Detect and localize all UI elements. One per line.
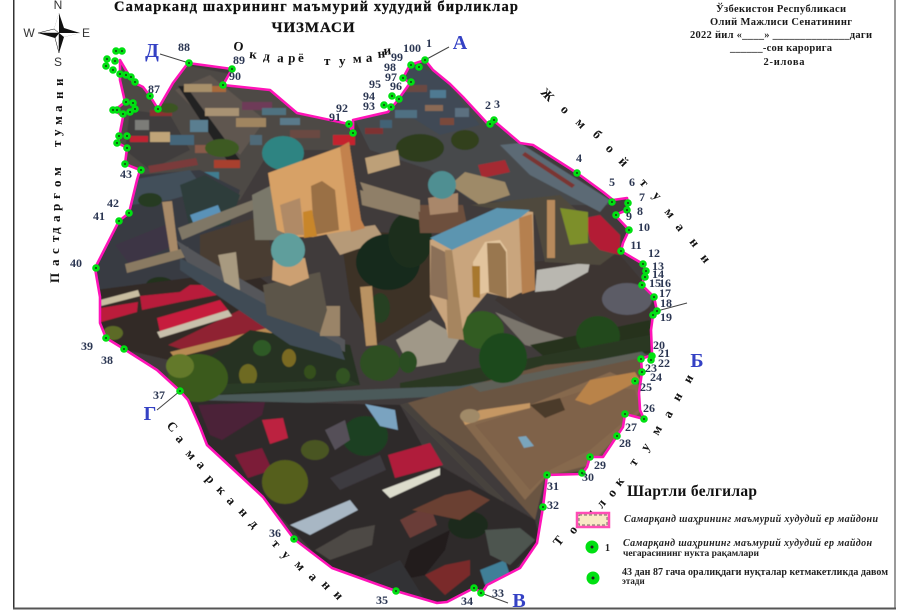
boundary point numbers: 95	[369, 77, 381, 91]
main portal trees	[460, 311, 504, 349]
legend item: boundary point numbers: чегарасининг нукта рақамлари	[623, 549, 760, 559]
boundary point numbers: 92	[336, 101, 348, 115]
boundary point numbers: 5	[609, 175, 615, 189]
boundary point numbers: 27	[625, 420, 637, 434]
boundary point numbers: 36	[269, 526, 281, 540]
boundary point numbers: 20	[653, 338, 665, 352]
boundary line	[95, 60, 657, 603]
boundary point numbers: 93	[363, 99, 375, 113]
boundary point numbers: 3	[494, 97, 500, 111]
corner letters: Г	[144, 403, 156, 425]
district label: Pastdargom: Пастдарғомтумани	[47, 78, 66, 283]
boundary point numbers: 8	[637, 204, 643, 218]
decree reference header	[690, 3, 872, 68]
north-east district	[355, 60, 610, 205]
legend item: points 43 to 87	[586, 567, 888, 586]
boundary point numbers: 19	[660, 310, 672, 324]
boundary point numbers: 98	[384, 60, 396, 74]
north-east small mosque	[418, 205, 467, 233]
south-west mosque	[263, 272, 327, 333]
boundary point numbers	[70, 36, 672, 608]
Bibi-Khanym main portal	[430, 210, 535, 337]
boundary point numbers: 41	[93, 209, 105, 223]
boundary point numbers: 2	[485, 98, 491, 112]
corner letters: Д	[145, 40, 159, 62]
corner letters	[144, 32, 704, 612]
boundary point numbers: 91	[329, 110, 341, 124]
base tone	[90, 50, 670, 610]
north-west mosque (Bibi-Khanym side)	[252, 185, 285, 240]
north-west district houses	[130, 84, 355, 185]
boundary point markers	[92, 47, 661, 597]
boundary point numbers: 39	[81, 339, 93, 353]
corner letters: А	[453, 32, 468, 54]
decree reference header: ______-сон карорига	[729, 43, 833, 54]
central garden courtyard	[340, 230, 432, 345]
legend title: Шартли белгилар	[627, 483, 757, 500]
boundary point numbers: 25	[640, 380, 652, 394]
aerial photograph of the Samarkand city area	[90, 50, 670, 610]
boundary point numbers: 29	[594, 458, 606, 472]
district label: Samarkand: Самаркандтумани	[164, 418, 347, 603]
decree reference header: Олий Мажлиси Сенатининг	[710, 17, 852, 28]
boundary point numbers: 99	[391, 50, 403, 64]
boundary point numbers: 12	[648, 246, 660, 260]
boundary point numbers: 15	[649, 276, 661, 290]
boundary point numbers: 87	[148, 82, 160, 96]
icon: compass rose: S	[54, 55, 62, 69]
district label: Okdaryo: Окдарётумани	[233, 38, 392, 68]
south-east stone plaza	[400, 355, 650, 520]
icon: compass rose: W	[23, 26, 35, 40]
icon: compass rose	[23, 0, 90, 69]
legend item: administrative land area: Самарқанд шаҳрининг маъмурий худудий ер майдони	[624, 514, 878, 525]
decree reference header: 2022 йил «____» ______________даги	[690, 30, 872, 41]
boundary point numbers: 100	[403, 41, 421, 55]
east garden trees	[530, 320, 650, 356]
boundary point numbers: 33	[492, 586, 504, 600]
decree reference header: 2-илова	[764, 57, 805, 68]
boundary point numbers: 32	[547, 498, 559, 512]
boundary point numbers: 6	[629, 175, 635, 189]
boundary point numbers: 9	[626, 209, 632, 223]
legend item: boundary point numbers	[586, 538, 872, 559]
boundary point numbers: 97	[385, 70, 397, 84]
legend item: boundary point numbers: Самарқанд шаҳрининг маъмурий худудий ер майдон	[623, 538, 872, 549]
corner letters: В	[512, 590, 526, 612]
Bibi-Khanym main road	[209, 351, 646, 403]
north-east forecourt	[470, 195, 620, 265]
boundary point numbers: 90	[229, 69, 241, 83]
boundary point numbers: 1	[426, 36, 432, 50]
north-west courtyard and walls	[200, 220, 272, 281]
boundary point numbers: 88	[178, 40, 190, 54]
legend item: points 43 to 87: 43 дан 87 гача оралиқдаги нуқталар кетмакетликда давом	[622, 567, 888, 578]
boundary point numbers: 14	[652, 267, 664, 281]
dark east plaza	[496, 256, 650, 337]
boundary point numbers: 23	[645, 361, 657, 375]
boundary point numbers: 17	[659, 286, 671, 300]
boundary point numbers: 89	[233, 53, 245, 67]
west district	[139, 170, 240, 280]
boundary point numbers: 18	[660, 296, 672, 310]
boundary point numbers: 7	[639, 190, 645, 204]
district label: Jomboy: Жомбойтумани	[538, 85, 714, 266]
boundary point numbers: 16	[659, 276, 671, 290]
boundary point numbers: 26	[643, 401, 655, 415]
boundary marker centres	[95, 50, 658, 594]
district label: Toshloq: Тошлоктумани	[550, 371, 697, 549]
legend item: boundary point numbers: 1	[605, 543, 610, 554]
boundary point numbers: 37	[153, 388, 165, 402]
south-west trees	[168, 354, 228, 402]
title	[114, 0, 518, 36]
boundary point numbers: 34	[461, 594, 473, 608]
boundary point numbers: 21	[658, 346, 670, 360]
corner letters: Б	[690, 350, 704, 372]
red roof quarter	[100, 278, 268, 360]
boundary point numbers: 40	[70, 256, 82, 270]
boundary point numbers: 96	[390, 79, 402, 93]
boundary point numbers: 28	[619, 436, 631, 450]
boundary point numbers: 30	[582, 470, 594, 484]
boundary point numbers: 4	[576, 151, 582, 165]
boundary point numbers: 94	[363, 89, 375, 103]
boundary point numbers: 42	[107, 196, 119, 210]
icon: compass rose: E	[82, 26, 90, 40]
boundary point numbers: 10	[638, 220, 650, 234]
legend	[577, 483, 888, 586]
legend item: points 43 to 87: этади	[622, 576, 645, 586]
central gardens	[212, 330, 360, 395]
boundary point numbers: 43	[120, 167, 132, 181]
title: ЧИЗМАСИ	[272, 20, 355, 36]
leader lines to corner letters	[157, 47, 687, 603]
boundary point numbers: 22	[658, 356, 670, 370]
boundary point numbers: 11	[630, 238, 642, 252]
boundary point numbers: 35	[376, 593, 388, 607]
southern district	[190, 400, 540, 605]
boundary point numbers: 24	[650, 370, 662, 384]
boundary point numbers: 38	[101, 353, 113, 367]
legend item: administrative land area	[577, 513, 878, 527]
minarets	[547, 200, 555, 258]
decree reference header: Ўзбекистон Республикаси	[716, 3, 846, 15]
north-east district houses	[365, 85, 469, 134]
north-west district	[120, 66, 356, 200]
boundary point numbers: 31	[547, 479, 559, 493]
boundary point numbers: 13	[652, 259, 664, 273]
